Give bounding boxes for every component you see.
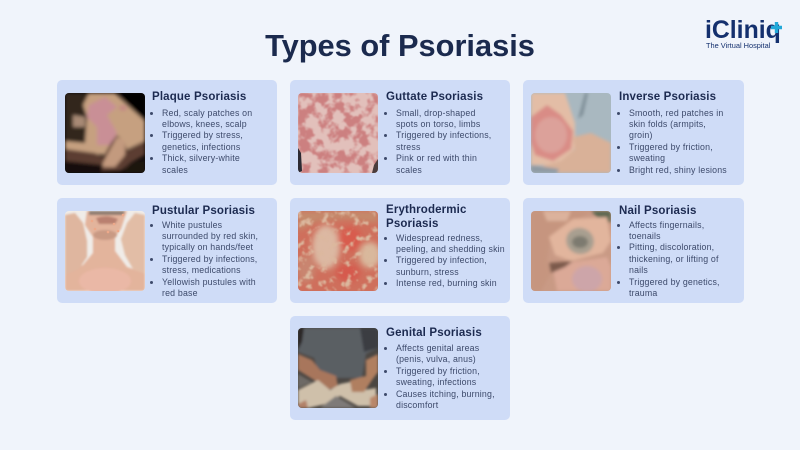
heading: Guttate Psoriasis (386, 91, 483, 103)
logo: iCliniq (705, 17, 782, 50)
panel: inverse psoriasis (523, 80, 744, 185)
photo: pustular psoriasis (65, 211, 145, 291)
symptom list: Triggered by genetics, (629, 277, 720, 287)
heading: Psoriasis (386, 218, 438, 230)
heading (386, 204, 467, 230)
title: Types of Psoriasis (265, 28, 535, 63)
symptom list (384, 343, 495, 410)
logo plus icon (771, 22, 782, 33)
symptom list: Yellowish pustules with (162, 277, 256, 287)
photo: nail psoriasis (531, 211, 611, 291)
symptom list: skin folds (armpits, (629, 119, 706, 129)
symptom list: Triggered by infections, (396, 130, 491, 140)
symptom list: stress, medications (162, 265, 241, 275)
symptom list: elbows, knees, scalp (162, 119, 247, 129)
symptom list: peeling, and shedding skin (396, 244, 505, 254)
symptom list: Affects fingernails, (629, 220, 704, 230)
symptom list: toenails (629, 231, 661, 241)
symptom list: groin) (629, 130, 653, 140)
symptom list: Triggered by infections, (162, 254, 257, 264)
panel: pustular psoriasis (57, 198, 277, 303)
symptom list: Thick, silvery-white (162, 153, 240, 163)
symptom list: nails (629, 265, 648, 275)
panel: genital psoriasis (290, 316, 510, 420)
heading: Nail Psoriasis (619, 205, 697, 217)
symptom list: red base (162, 288, 198, 298)
symptom list: Small, drop-shaped (396, 108, 476, 118)
panel: plaque psoriasis (57, 80, 277, 185)
heading: Inverse Psoriasis (619, 91, 716, 103)
symptom list: Causes itching, burning, (396, 389, 495, 399)
symptom list: spots on torso, limbs (396, 119, 480, 129)
panel: nail psoriasis (523, 198, 744, 303)
symptom list (617, 108, 727, 175)
symptom list: Pink or red with thin (396, 153, 477, 163)
panel: erythrodermic psoriasis (290, 198, 510, 303)
symptom list: genetics, infections (162, 142, 240, 152)
symptom list: sunburn, stress (396, 267, 459, 277)
symptom list (150, 220, 258, 298)
symptom list: discomfort (396, 400, 438, 410)
photo: erythrodermic psoriasis (298, 211, 378, 291)
symptom list (384, 108, 491, 175)
photo: inverse psoriasis (531, 93, 611, 173)
symptom list (384, 232, 505, 288)
heading: Plaque Psoriasis (152, 91, 246, 103)
symptom list: (penis, vulva, anus) (396, 354, 476, 364)
heading: Pustular Psoriasis (152, 205, 255, 217)
heading: Erythrodermic (386, 204, 467, 216)
symptom list: scales (162, 165, 188, 175)
symptom list: sweating, infections (396, 377, 476, 387)
symptom list: Triggered by stress, (162, 130, 243, 140)
photo: genital psoriasis (298, 328, 378, 408)
symptom list: thickening, or lifting of (629, 254, 719, 264)
symptom list: Triggered by friction, (396, 366, 480, 376)
symptom list: Pitting, discoloration, (629, 242, 714, 252)
symptom list: sweating (629, 153, 665, 163)
panel: guttate psoriasis (290, 80, 510, 185)
symptom list: White pustules (162, 220, 222, 230)
logo tagline: The Virtual Hospital (706, 41, 770, 50)
symptom list: Intense red, burning skin (396, 278, 497, 288)
heading: Genital Psoriasis (386, 327, 482, 339)
logo wordmark: iCliniq (705, 17, 781, 44)
symptom list: Triggered by infection, (396, 255, 487, 265)
photo: plaque psoriasis (65, 93, 145, 173)
symptom list: Triggered by friction, (629, 142, 713, 152)
symptom list (617, 220, 720, 298)
symptom list: Smooth, red patches in (629, 108, 723, 118)
symptom list (150, 108, 252, 175)
photo: guttate psoriasis (298, 93, 378, 173)
symptom list: surrounded by red skin, (162, 231, 258, 241)
symptom list: typically on hands/feet (162, 242, 253, 252)
symptom list: Red, scaly patches on (162, 108, 252, 118)
symptom list: Affects genital areas (396, 343, 479, 353)
symptom list: Bright red, shiny lesions (629, 165, 727, 175)
symptom list: stress (396, 142, 421, 152)
symptom list: trauma (629, 288, 657, 298)
symptom list: Widespread redness, (396, 232, 483, 242)
symptom list: scales (396, 165, 422, 175)
